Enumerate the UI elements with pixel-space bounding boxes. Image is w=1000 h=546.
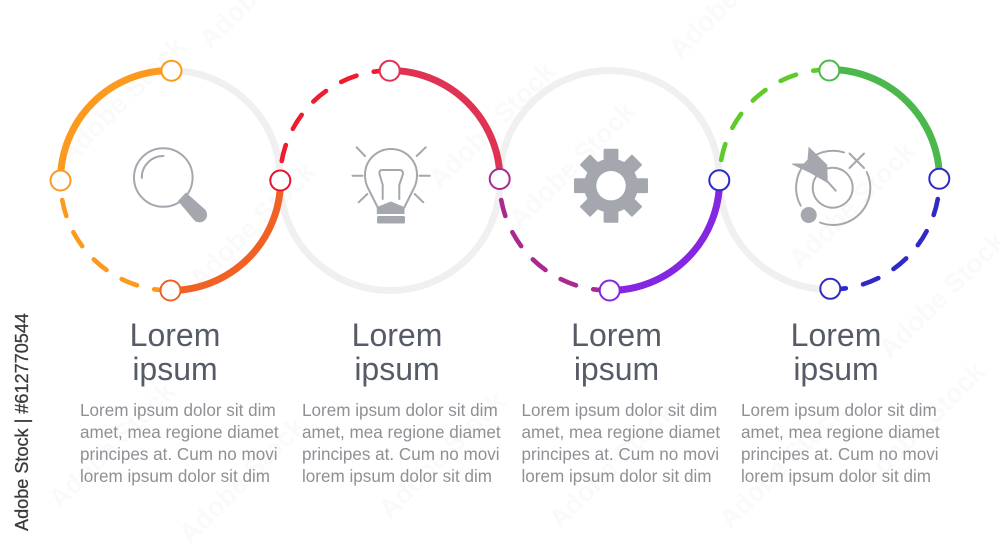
faint stock watermark: Adobe Stock: [853, 356, 992, 494]
faint stock watermark: Adobe Stock: [543, 396, 682, 534]
step 1 text: [80, 317, 279, 486]
faint stock watermark: Adobe Stock: [423, 56, 562, 194]
text: lorem ipsum dolor sit dim: [80, 467, 270, 486]
icon: gear: [574, 149, 648, 223]
ring 2 arcs: [282, 70, 500, 180]
text: Lorem ipsum dolor sit dim: [741, 401, 937, 420]
step 3 text: [522, 317, 720, 486]
text: amet, mea regione diamet: [302, 423, 501, 442]
faint stock watermark: Adobe Stock: [503, 96, 642, 234]
text: ipsum: [793, 351, 879, 387]
text: ipsum: [574, 351, 659, 387]
icon: magnifier: [134, 148, 207, 222]
text: Lorem: [791, 317, 881, 353]
ring nodes: [50, 60, 949, 300]
faint stock watermark: Adobe Stock: [373, 386, 512, 524]
step 4 text: [741, 317, 940, 486]
text: Lorem ipsum dolor sit dim: [522, 401, 717, 420]
ring 4 arcs: [721, 69, 940, 289]
text: lorem ipsum dolor sit dim: [302, 467, 492, 486]
text: lorem ipsum dolor sit dim: [741, 467, 931, 486]
text: lorem ipsum dolor sit dim: [522, 467, 711, 486]
text: amet, mea regione diamet: [741, 423, 940, 442]
faint stock watermark: Adobe Stock: [43, 376, 182, 514]
text: Lorem ipsum dolor sit dim: [302, 401, 498, 420]
icon: target with arrow: [792, 148, 870, 225]
text: principes at. Cum no movi: [80, 445, 278, 464]
text: principes at. Cum no movi: [522, 445, 719, 464]
grey ring segments: [170, 70, 830, 290]
ring 1 arcs: [60, 70, 280, 290]
faint stock watermark: Adobe Stock: [173, 411, 312, 546]
text: Lorem: [352, 317, 442, 353]
faint stock watermark: Adobe Stock: [783, 136, 922, 274]
step 2 text: [302, 317, 501, 486]
text: Lorem ipsum dolor sit dim: [80, 401, 276, 420]
text: principes at. Cum no movi: [741, 445, 939, 464]
vertical stock credit: Adobe Stock | #612770544: [12, 313, 32, 530]
text: Lorem: [130, 317, 220, 353]
text: principes at. Cum no movi: [302, 445, 500, 464]
text: amet, mea regione diamet: [522, 423, 720, 442]
faint stock watermark: Adobe Stock: [53, 31, 192, 169]
faint stock watermark: Adobe Stock: [183, 156, 322, 294]
text: ipsum: [354, 351, 440, 387]
text: amet, mea regione diamet: [80, 423, 279, 442]
text: Lorem: [571, 317, 662, 353]
text: ipsum: [132, 351, 218, 387]
icon: light bulb: [352, 147, 430, 223]
ring 3 arcs: [501, 180, 720, 290]
faint stock watermark: Adobe Stock: [713, 396, 852, 534]
